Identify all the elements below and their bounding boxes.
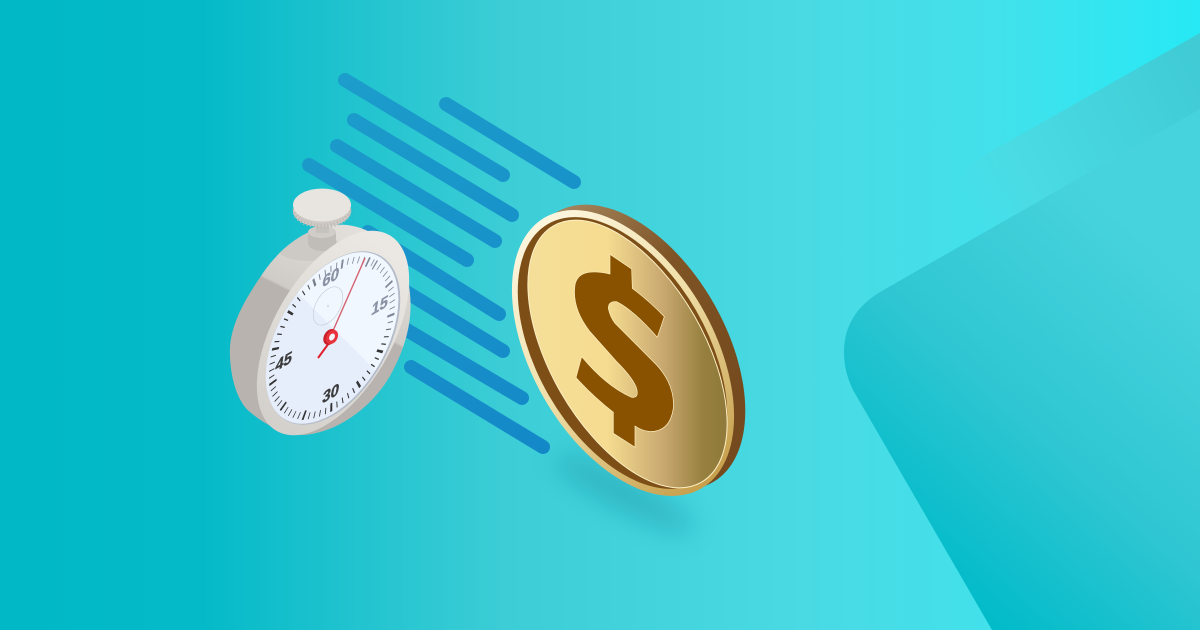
background shape: front rounded panel <box>844 109 1200 630</box>
stopwatch hand <box>318 258 365 358</box>
dial numeral 45: 45 <box>274 347 294 376</box>
background shape: rear rounded panel <box>961 33 1200 260</box>
dollar sign <box>574 254 673 447</box>
coin <box>466 167 791 534</box>
speed lines <box>309 80 574 447</box>
dial numeral 30: 30 <box>321 379 340 408</box>
dial numeral 60: 60 <box>321 263 340 292</box>
coin edge <box>479 167 791 527</box>
knob collar shade <box>276 233 340 261</box>
stopwatch knob <box>293 188 351 251</box>
dial numeral 15: 15 <box>370 291 390 320</box>
coin rim <box>466 172 780 534</box>
stopwatch body <box>230 225 411 435</box>
coin shadow <box>549 444 701 544</box>
stopwatch <box>230 188 411 436</box>
coin face <box>487 187 768 521</box>
coin inner groove <box>474 181 771 525</box>
stopwatch bezel <box>225 206 441 460</box>
stopwatch dial <box>266 251 400 425</box>
minute ticks <box>247 239 417 437</box>
